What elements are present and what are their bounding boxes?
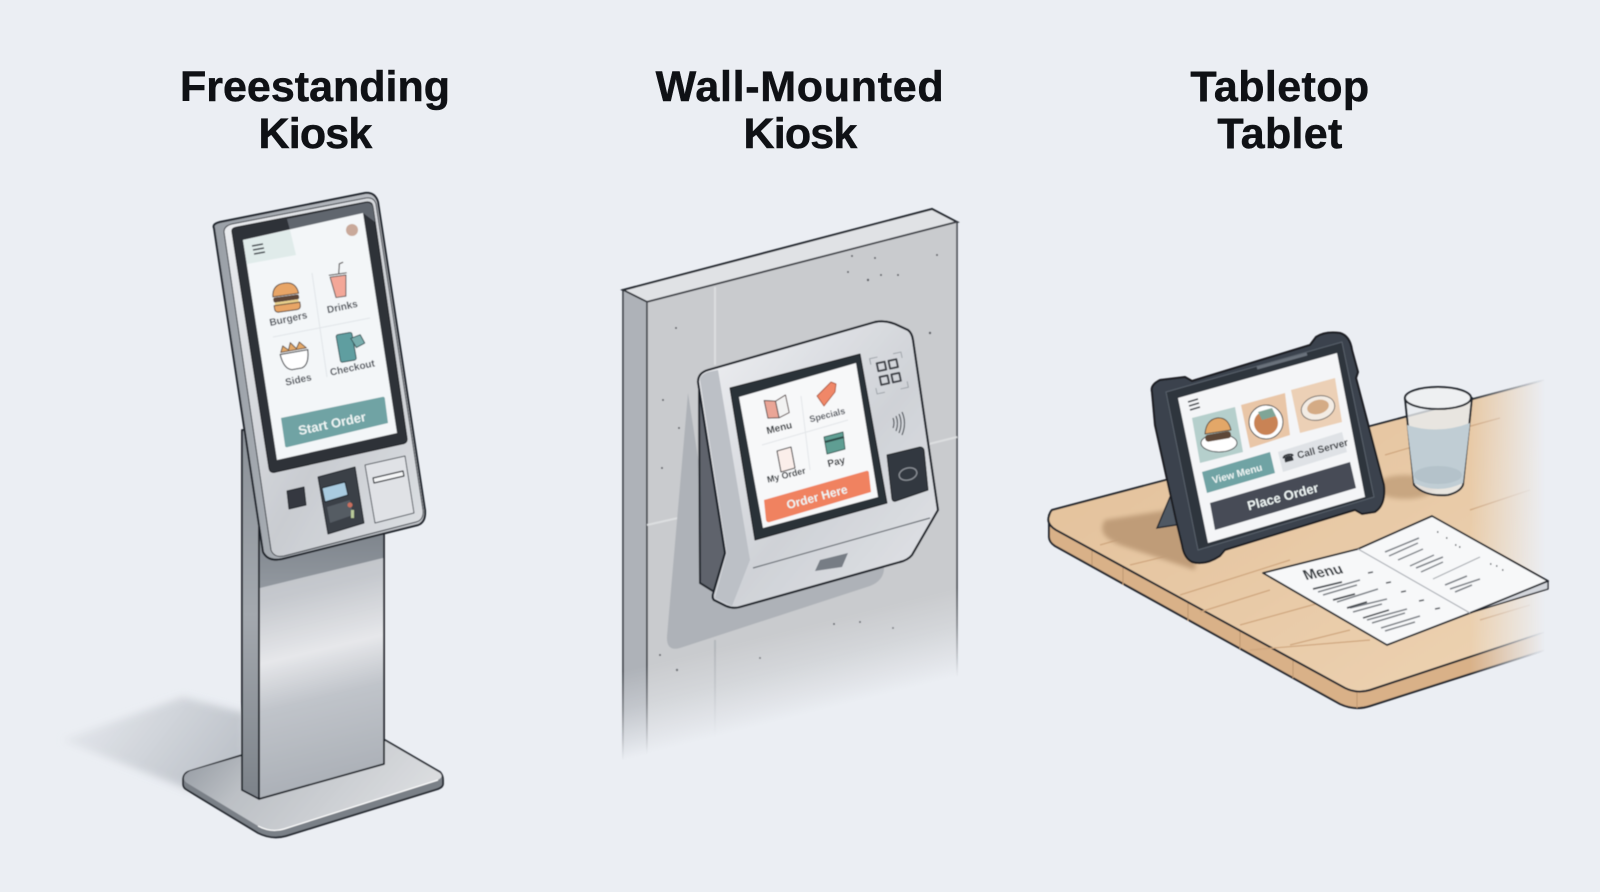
menu fold (1358, 549, 1470, 613)
button: Place Order (1210, 462, 1356, 530)
pillar (242, 430, 384, 799)
camera notch (1257, 354, 1307, 368)
title: Tabletop Tablet: Tablet (1217, 110, 1343, 158)
edge plank seams (1092, 547, 1357, 708)
label: Drinks: Drinks (326, 299, 359, 316)
button: Start Order (281, 397, 388, 447)
screen bezel (730, 354, 887, 540)
illustration: tabletop tablet (1048, 332, 1548, 708)
button: Order Here: Order Here (785, 482, 849, 512)
label: Menu: Menu (1300, 561, 1346, 584)
food tile: burger (1192, 407, 1243, 463)
icon: fries bowl (278, 340, 311, 371)
case inner line (1166, 342, 1374, 550)
label: My Order: My Order (766, 465, 807, 485)
icon: credit card (824, 432, 845, 454)
base plate (183, 740, 443, 837)
screen bezel (232, 202, 407, 472)
button: Start Order: Start Order (297, 409, 367, 438)
bezel reflection (287, 203, 375, 230)
lower trim (753, 518, 930, 568)
QR code (870, 352, 908, 394)
body side strip (700, 370, 750, 606)
title: Freestanding Kiosk: Kiosk (258, 110, 372, 158)
contactless symbol (893, 412, 904, 435)
device body (698, 321, 938, 608)
menu icon (1188, 399, 1200, 410)
wall shadow (667, 393, 884, 649)
head front (224, 198, 423, 556)
food tile: bowl (1291, 378, 1342, 433)
table grain (1100, 418, 1530, 650)
button: View Menu (1202, 452, 1275, 493)
button: Call Server: ☎ Call Server (1281, 438, 1349, 466)
label: Sides: Sides (284, 372, 313, 389)
kiosk head (214, 193, 425, 560)
touch screen (243, 213, 397, 460)
title: Wall-Mounted Kiosk: Wall-Mounted (656, 63, 944, 111)
icon: my order clipboard (777, 447, 795, 472)
button: Call Server (1278, 432, 1349, 472)
wall top (623, 209, 957, 302)
food tile: plate (1241, 393, 1290, 448)
receipt printer (365, 456, 414, 523)
concrete wall (623, 209, 957, 770)
menu text lines (1313, 532, 1504, 631)
wall joints and specks (646, 254, 958, 705)
table edge (1049, 515, 1545, 708)
icon: menu book (764, 395, 790, 420)
icon: specials tag (817, 382, 836, 406)
touch screen (739, 363, 878, 528)
screen dividers (762, 396, 848, 470)
screen header tint (243, 230, 296, 264)
button: Order Here (764, 471, 871, 522)
tablet (1152, 332, 1384, 563)
screen dividers (273, 273, 370, 377)
tablet and glass shadows (1102, 505, 1200, 570)
tablet stand (1157, 497, 1182, 528)
title: Tabletop Tablet: Tabletop (1190, 63, 1370, 111)
label: Pay: Pay (826, 455, 847, 470)
camera square (287, 487, 306, 509)
table top (1048, 380, 1545, 692)
label: Specials: Specials (808, 406, 846, 424)
label: Menu: Menu (765, 420, 793, 437)
icon: checkout phone (336, 330, 367, 363)
speaker slot (815, 553, 848, 571)
tablet screen (1178, 353, 1365, 543)
wall side (623, 290, 647, 770)
paper menu (1263, 516, 1548, 645)
button: View Menu: View Menu (1211, 463, 1264, 487)
label: Burgers: Burgers (269, 310, 309, 329)
illustration: freestanding kiosk (63, 193, 443, 837)
water glass (1405, 387, 1472, 495)
floor shadow (63, 697, 245, 790)
avatar (346, 224, 358, 236)
menu icon (252, 244, 265, 254)
payment terminal (318, 467, 364, 534)
card reader (887, 447, 928, 501)
tablet case (1152, 332, 1384, 563)
icon: burger (271, 281, 301, 313)
label: Checkout: Checkout (329, 358, 377, 379)
illustration: wall-mounted kiosk (623, 209, 957, 770)
wall front (647, 222, 957, 770)
device side (699, 385, 728, 593)
wooden table (1048, 380, 1545, 708)
icon: drink (327, 262, 350, 298)
button: Place Order: Place Order (1246, 480, 1320, 513)
head body (214, 193, 425, 560)
title: Wall-Mounted Kiosk: Kiosk (743, 110, 857, 158)
title: Freestanding Kiosk: Freestanding (180, 63, 450, 111)
mounted device (698, 321, 938, 608)
